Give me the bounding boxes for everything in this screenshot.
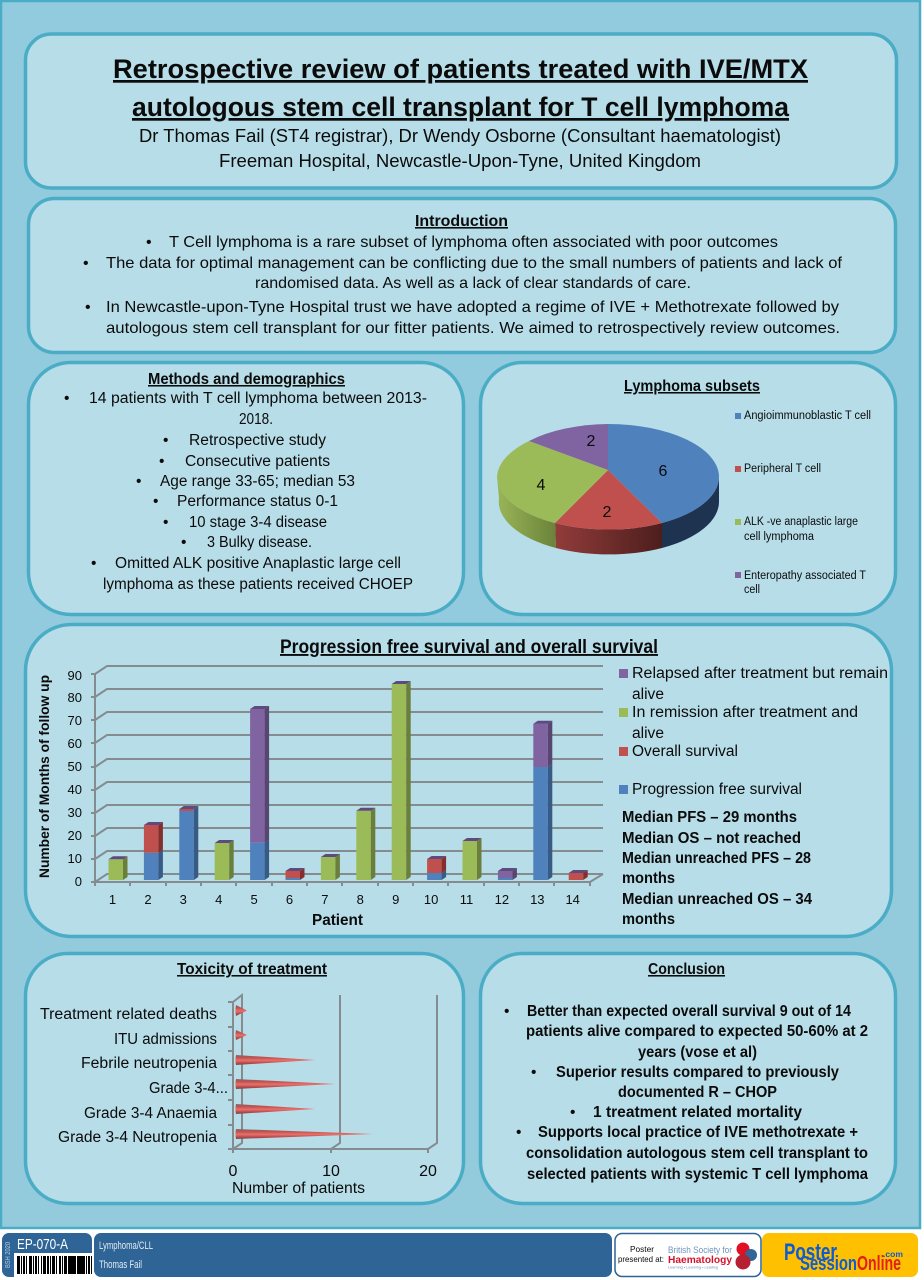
x axis labels: 1	[109, 892, 116, 907]
conclusion bullets: •	[516, 1124, 521, 1141]
footer: British Society for Haematology logo: Poster	[630, 1244, 654, 1254]
conclusion bullets: 1 treatment related mortality	[593, 1104, 802, 1121]
x axis labels: 3	[180, 892, 187, 907]
toxicity axis title: Number of patients	[232, 1180, 365, 1197]
bar: patient 13	[533, 721, 552, 880]
x axis labels: 14	[565, 892, 580, 907]
median survival figures	[622, 809, 812, 928]
footer: British Society for Haematology logo: presented at:	[618, 1254, 664, 1264]
survival chart legend: Progression free survival	[632, 781, 802, 798]
panel: conclusion	[480, 954, 896, 1204]
footer: poster id and barcode: EP-070-A	[17, 1236, 68, 1253]
methods bullets: •	[91, 555, 96, 572]
methods bullets: lymphoma as these patients received CHOEP	[103, 576, 413, 593]
cone: grade 3-4 anaemia	[236, 1104, 315, 1114]
y axis labels: 20	[68, 828, 82, 843]
methods bullets	[64, 390, 427, 593]
survival chart legend: alive	[632, 686, 664, 703]
toxicity category labels: ITU admissions	[114, 1031, 217, 1048]
cone: treatment related deaths	[236, 1005, 247, 1016]
heading: introduction: Introduction	[415, 213, 508, 230]
conclusion bullets: consolidation autologous stem cell transplant to	[526, 1145, 868, 1162]
authors and affiliation	[139, 126, 781, 171]
conclusion bullets: selected patients with systemic T cell lymphoma	[527, 1166, 868, 1183]
cone: febrile neutropenia	[236, 1055, 315, 1065]
bar: patient 6	[286, 868, 304, 880]
footer: topic and presenter: Lymphoma/CLL	[99, 1240, 153, 1252]
survival chart legend	[619, 665, 888, 798]
y axis labels: 90	[68, 668, 82, 683]
median survival figures: months	[622, 870, 675, 887]
heading: poster title	[113, 54, 808, 122]
survival chart legend: Overall survival	[632, 743, 738, 760]
methods bullets: 14 patients with T cell lymphoma between 2013-	[89, 390, 427, 407]
median survival figures: Median unreached OS – 34	[622, 891, 812, 908]
methods bullets: •	[153, 493, 158, 510]
bar: patient 9	[392, 681, 411, 880]
pie chart: lymphoma subsets: 4	[537, 477, 546, 494]
x axis labels: 11	[460, 892, 473, 907]
conclusion bullets: Better than expected overall survival 9 out of 14	[527, 1003, 851, 1020]
introduction bullets: The data for optimal management can be conflicting due to the small numbers of patients and lack of	[106, 255, 843, 272]
y axis labels: 80	[68, 690, 82, 705]
x axis labels: 10	[424, 892, 438, 907]
conclusion bullets: Supports local practice of IVE methotrexate +	[538, 1124, 858, 1141]
footer: British Society for Haematology logo: Haematology	[668, 1254, 732, 1266]
y axis labels: 70	[68, 713, 82, 728]
toxicity category labels: Treatment related deaths	[40, 1006, 217, 1023]
panel: title	[26, 34, 896, 188]
x axis labels	[109, 892, 580, 907]
pie legend	[735, 410, 871, 596]
y axis labels: 60	[68, 736, 82, 751]
conclusion bullets: documented R – CHOP	[618, 1084, 777, 1101]
conclusion bullets: •	[570, 1104, 575, 1121]
bar chart: months of follow up by patient	[36, 666, 603, 929]
toxicity category labels: Grade 3-4 Anaemia	[84, 1105, 217, 1122]
introduction bullets: •	[146, 234, 152, 251]
survival chart legend: Relapsed after treatment but remain	[632, 665, 888, 682]
pie legend: cell	[744, 584, 760, 596]
x axis labels: 6	[286, 892, 293, 907]
heading: survival: Progression free survival and overall survival	[280, 637, 658, 658]
bar: patient 10	[427, 856, 446, 880]
footer: topic and presenter: Thomas Fail	[99, 1259, 142, 1271]
methods bullets: •	[181, 534, 186, 551]
toxicity axis labels: 10	[322, 1163, 340, 1180]
bar: patient 11	[462, 838, 482, 880]
methods bullets: •	[159, 453, 164, 470]
panel: lymphoma subsets	[480, 362, 896, 614]
conclusion bullets: patients alive compared to expected 50-60% at 2	[526, 1023, 868, 1040]
methods bullets: •	[64, 390, 69, 407]
toxicity category labels: Febrile neutropenia	[81, 1055, 217, 1072]
bar: patient 8	[356, 808, 375, 880]
pie legend: cell lymphoma	[744, 531, 815, 543]
pie legend: ALK -ve anaplastic large	[744, 516, 858, 528]
footer: topic and presenter	[94, 1233, 612, 1277]
methods bullets: 3 Bulky disease.	[207, 534, 312, 551]
x axis labels: 8	[357, 892, 364, 907]
methods bullets: •	[163, 432, 168, 449]
bar: patient 3	[179, 806, 198, 880]
survival chart legend: In remission after treatment and	[632, 704, 858, 721]
footer: PosterSessionOnline logo: Online	[857, 1253, 901, 1275]
conclusion bullets: years (vose et al)	[638, 1044, 757, 1061]
toxicity category labels	[40, 1006, 228, 1146]
cone: grade 3-4 neutropenia	[236, 1129, 373, 1139]
heading: poster title: Retrospective review of patients treated with IVE/MTX	[113, 54, 808, 84]
pie chart: lymphoma subsets: 6	[659, 463, 668, 480]
toxicity axis labels	[229, 1163, 437, 1180]
y axis labels: 0	[75, 874, 82, 889]
conclusion bullets: •	[504, 1003, 509, 1020]
pie legend: Enteropathy associated T	[744, 570, 866, 582]
methods bullets: Age range 33-65; median 53	[160, 473, 355, 490]
heading: poster title: autologous stem cell transplant for T cell lymphoma	[132, 92, 790, 122]
introduction bullets: autologous stem cell transplant for our fitter patients. We aimed to retrospectively review outcomes.	[106, 320, 840, 337]
footer: British Society for Haematology logo: Learning • Learning • Leading	[668, 1266, 718, 1270]
y axis labels: 10	[68, 851, 82, 866]
pie legend: Peripheral T cell	[744, 463, 821, 475]
toxicity category labels: Grade 3-4 Neutropenia	[58, 1129, 217, 1146]
y axis labels	[68, 668, 82, 889]
introduction bullets: T Cell lymphoma is a rare subset of lymphoma often associated with poor outcomes	[169, 234, 778, 251]
x axis labels: 13	[530, 892, 545, 907]
introduction bullets: randomised data. As well as a lack of clear standards of care.	[255, 275, 691, 292]
bar: patient 1	[108, 856, 128, 880]
bar: patient 14	[569, 870, 588, 880]
x axis labels: 2	[144, 892, 152, 907]
heading: toxicity: Toxicity of treatment	[177, 961, 327, 978]
heading: methods: Methods and demographics	[148, 371, 345, 388]
authors and affiliation: Freeman Hospital, Newcastle-Upon-Tyne, United Kingdom	[219, 151, 701, 171]
panel: toxicity of treatment	[26, 954, 464, 1204]
x axis labels: 5	[250, 892, 258, 907]
methods bullets: 2018.	[239, 411, 273, 428]
footer: British Society for Haematology logo: British Society for	[668, 1245, 732, 1256]
introduction bullets: In Newcastle-upon-Tyne Hospital trust we have adopted a regime of IVE + Methotrexate followed by	[106, 299, 839, 316]
footer: British Society for Haematology logo	[615, 1234, 761, 1276]
bar: patient 2	[144, 822, 163, 880]
conclusion bullets	[504, 1003, 868, 1183]
footer: PosterSessionOnline logo: Session	[800, 1253, 857, 1275]
methods bullets: •	[163, 514, 168, 531]
y axis title: Number of Months of follow up	[36, 675, 52, 878]
pie legend: Angioimmunoblastic T cell	[744, 410, 871, 422]
pie chart: lymphoma subsets	[497, 424, 719, 554]
methods bullets: 10 stage 3-4 disease	[189, 514, 327, 531]
conclusion bullets: •	[531, 1064, 536, 1081]
bar: patient 4	[215, 840, 234, 880]
toxicity axis labels: 0	[229, 1163, 238, 1180]
heading: lymphoma subsets: Lymphoma subsets	[624, 378, 760, 395]
bar: patient 7	[321, 854, 340, 880]
heading: conclusion: Conclusion	[648, 961, 725, 978]
panel: introduction	[28, 198, 896, 352]
introduction bullets	[83, 234, 843, 337]
y axis labels: 50	[68, 759, 82, 774]
panel: methods and demographics	[28, 362, 464, 614]
y axis labels: 40	[68, 782, 82, 797]
x axis labels: 4	[215, 892, 222, 907]
x axis labels: 9	[392, 892, 399, 907]
pie chart: lymphoma subsets: 2	[603, 504, 612, 521]
toxicity axis labels: 20	[419, 1163, 437, 1180]
pie chart: lymphoma subsets: 2	[587, 433, 596, 450]
x axis title: Patient	[312, 912, 363, 929]
x axis labels: 12	[495, 892, 509, 907]
bar: patient 5	[250, 706, 269, 880]
methods bullets: Consecutive patients	[185, 453, 330, 470]
methods bullets: Omitted ALK positive Anaplastic large cell	[115, 555, 401, 572]
median survival figures: Median OS – not reached	[622, 830, 801, 847]
cone: ITU admissions	[236, 1030, 247, 1040]
introduction bullets: •	[85, 299, 91, 316]
methods bullets: Performance status 0-1	[177, 493, 338, 510]
footer: poster id and barcode	[2, 1233, 92, 1277]
footer: PosterSessionOnline logo: Poster	[784, 1239, 837, 1266]
median survival figures: Median unreached PFS – 28	[622, 850, 811, 867]
y axis labels: 30	[68, 805, 82, 820]
bar: patient 12	[498, 868, 517, 880]
conclusion bullets: Superior results compared to previously	[556, 1064, 839, 1081]
survival chart legend: alive	[632, 725, 664, 742]
methods bullets: Retrospective study	[189, 432, 326, 449]
median survival figures: Median PFS – 29 months	[622, 809, 797, 826]
cone bar chart: toxicity	[40, 995, 437, 1197]
methods bullets: •	[136, 473, 141, 490]
authors and affiliation: Dr Thomas Fail (ST4 registrar), Dr Wendy Osborne (Consultant haematologist)	[139, 126, 781, 146]
footer: PosterSessionOnline logo: .com	[883, 1250, 903, 1259]
footer: PosterSessionOnline logo	[762, 1233, 918, 1277]
x axis labels: 7	[321, 892, 329, 907]
cone: grade 3-4 thrombocytopenia	[236, 1079, 335, 1089]
panel: progression free survival and overall survival	[26, 624, 892, 936]
introduction bullets: •	[83, 255, 89, 272]
median survival figures: months	[622, 911, 675, 928]
toxicity category labels: Grade 3-4...	[149, 1080, 228, 1097]
footer: poster id and barcode: BSH 2020	[5, 1242, 12, 1268]
